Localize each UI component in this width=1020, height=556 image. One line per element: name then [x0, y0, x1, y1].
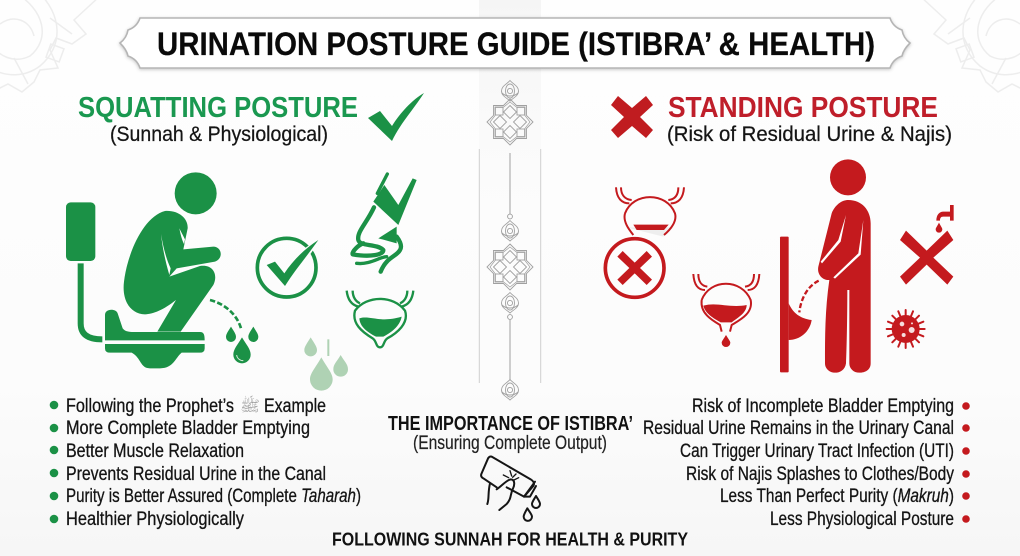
icon: muscle relaxation — [353, 174, 417, 272]
panel: central ornament divider — [479, 80, 541, 400]
icon: emptied bladder — [347, 291, 413, 347]
bullet item 3: Better Muscle Relaxation — [66, 441, 244, 462]
icon: green check mark — [368, 93, 424, 141]
heading: squatting posture: SQUATTING POSTURE — [78, 92, 358, 124]
corner ornament: top right — [920, 0, 1020, 92]
bullet item 1 — [50, 395, 326, 417]
icon: bladder with residual urine and cross — [605, 187, 684, 297]
icon: splash tap and large cross — [900, 205, 954, 285]
centre column band — [479, 0, 541, 420]
icon: squatting person on toilet — [66, 172, 221, 368]
bullet item 6: Healthier Physiologically — [66, 509, 244, 530]
heading: squatting posture — [78, 92, 358, 146]
urine stream and drops — [210, 300, 258, 363]
risk item 3: Can Trigger Urinary Tract Infection (UTI) — [680, 441, 954, 462]
list: squatting benefits — [50, 395, 361, 530]
panel: squatting illustrations — [66, 172, 417, 391]
heading: standing posture: STANDING POSTURE — [668, 92, 938, 124]
heading: standing posture — [667, 92, 952, 146]
icon: standing person at urinal — [780, 159, 871, 373]
bullet item 1: ﷺ — [240, 395, 260, 415]
heading: importance of istibra — [388, 413, 633, 454]
bullet item 2: More Complete Bladder Emptying — [66, 418, 310, 439]
panel: standing illustrations — [605, 159, 954, 373]
risk item 2: Residual Urine Remains in the Urinary Canal — [643, 418, 954, 439]
risk item 5: Less Than Perfect Purity (Makruh) — [720, 486, 954, 507]
heading: standing posture: (Risk of Residual Urine & Najis) — [667, 123, 952, 146]
title banner — [120, 18, 910, 68]
heading: squatting posture: (Sunnah & Physiological) — [110, 123, 328, 146]
corner ornament: top left — [0, 0, 100, 92]
heading: importance of istibra: (Ensuring Complete Output) — [413, 433, 607, 454]
bullet item 5: Purity is Better Assured (Complete Taharah) — [66, 486, 361, 507]
bullet item 1: Following the Prophet’s — [66, 396, 234, 417]
risk item 4: Risk of Najis Splashes to Clothes/Body — [686, 464, 954, 485]
icon: red cross mark — [611, 96, 653, 138]
list: standing risks — [643, 396, 970, 530]
icon: hand squeezing bottle — [481, 456, 540, 521]
icon: virus — [887, 310, 925, 348]
footer tagline: FOLLOWING SUNNAH FOR HEALTH & PURITY — [332, 530, 688, 550]
icon: faded water drops — [304, 337, 348, 391]
title banner: URINATION POSTURE GUIDE (ISTIBRA’ & HEALTH) — [157, 26, 875, 62]
bullet item 1: Example — [264, 396, 326, 417]
risk item 6: Less Physiological Posture — [770, 509, 954, 530]
bullet item 4: Prevents Residual Urine in the Canal — [66, 464, 326, 485]
icon: check in circle — [257, 238, 322, 297]
icon: bladder dripping — [693, 274, 759, 347]
risk item 1: Risk of Incomplete Bladder Emptying — [692, 396, 954, 417]
heading: importance of istibra: THE IMPORTANCE OF ISTIBRA’ — [388, 413, 633, 435]
